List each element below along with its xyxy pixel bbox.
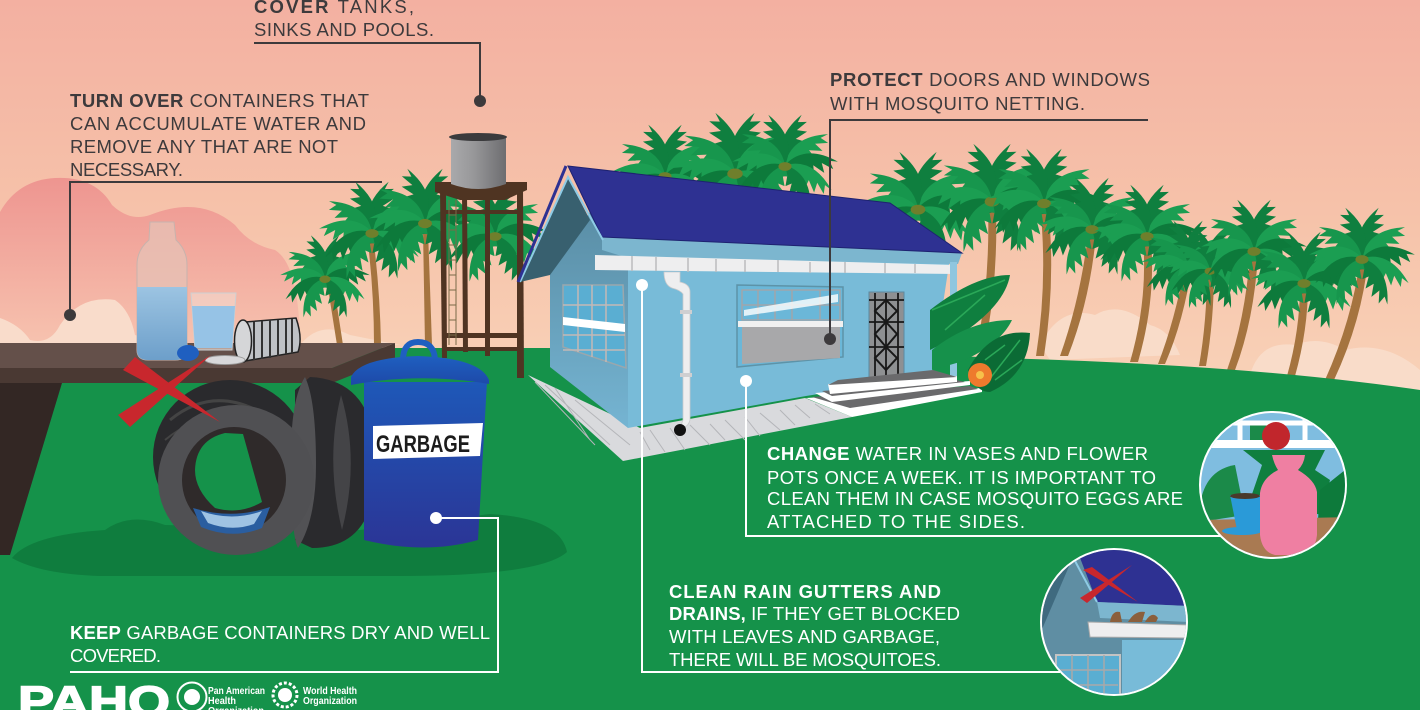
cover tanks leader line [254, 43, 480, 101]
palm left group [279, 166, 549, 345]
downpipe [664, 272, 692, 436]
protect leader line [830, 120, 1148, 339]
house [518, 166, 982, 461]
porch column [950, 262, 957, 379]
circle inset: blocked gutter [1040, 548, 1190, 700]
change water text: ATTACHED TO THE SIDES. [767, 511, 1025, 532]
change water text [767, 443, 1183, 532]
green ground [0, 348, 1420, 710]
foundation pattern [535, 382, 830, 452]
PAHO emblem [178, 682, 206, 710]
gable roof edge [520, 177, 603, 282]
table with containers [0, 343, 395, 555]
can lid and bottle cap [177, 345, 245, 364]
bin label text: GARBAGE [376, 431, 470, 458]
side wall [550, 212, 628, 428]
turn over leader line [70, 182, 382, 315]
banana and monstera leaves with hibiscus [930, 275, 1030, 392]
WHO name [303, 685, 357, 707]
clean gutters text: CLEAN RAIN GUTTERS AND [669, 581, 941, 602]
clean gutters leader line [642, 285, 1060, 672]
table front [0, 343, 395, 383]
bin lid [351, 356, 489, 385]
keep garbage leader line [70, 518, 498, 672]
clean gutters text: WITH LEAVES AND GARBAGE, [669, 626, 940, 647]
glass of water [191, 293, 236, 350]
cover tanks text: SINKS AND POOLS. [254, 19, 434, 40]
circle inset: vase and flower pot [1195, 410, 1355, 560]
tip: keep garbage containers dry [70, 512, 498, 672]
water tank [449, 133, 507, 189]
clean gutters text: THERE WILL BE MOSQUITOES. [669, 649, 941, 670]
door with security grille [869, 292, 904, 377]
gable shade [520, 178, 590, 282]
PAHO name: Health [208, 695, 236, 707]
tip: cover tanks [254, 0, 486, 107]
tower legs [435, 182, 527, 378]
PAHO name [208, 685, 265, 710]
rain gutter [595, 255, 957, 274]
fascia under roof [602, 237, 962, 264]
change water text: CHANGE WATER IN VASES AND FLOWER [767, 443, 1148, 464]
sky background [0, 0, 1420, 400]
clean gutters text: DRAINS, IF THEY GET BLOCKED [669, 603, 960, 624]
front wall [628, 250, 950, 428]
front window with netting [737, 285, 843, 367]
ladder [449, 200, 456, 345]
change water leader line [746, 381, 1222, 536]
keep garbage text: COVERED. [70, 645, 161, 666]
bin handle [403, 342, 435, 360]
protect text [830, 69, 1150, 114]
red X over discarded containers [118, 355, 220, 427]
change water text: CLEAN THEM IN CASE MOSQUITO EGGS ARE [767, 488, 1183, 509]
bin body [364, 382, 487, 548]
bin label [373, 423, 483, 459]
table top [0, 343, 395, 368]
water tower [435, 133, 527, 378]
turn over text [70, 90, 369, 180]
tip: clean rain gutters [636, 279, 1060, 672]
PAHO name: Pan American [208, 685, 265, 697]
protect text: WITH MOSQUITO NETTING. [830, 93, 1085, 114]
tip: turn over containers [64, 90, 382, 321]
entry steps [806, 370, 982, 417]
keep garbage text [70, 622, 490, 666]
PAHO logo [18, 678, 357, 710]
blue roof [568, 166, 962, 253]
palm crowns behind house [611, 110, 839, 233]
keep garbage text: KEEP GARBAGE CONTAINERS DRY AND WELL [70, 622, 490, 643]
foundation [528, 375, 852, 461]
WHO emblem [273, 683, 297, 707]
table leg [0, 383, 62, 555]
turn over text: NECESSARY. [70, 159, 183, 180]
clean gutters text [669, 581, 960, 670]
front tire with standing water [158, 405, 314, 555]
turn over text: CAN ACCUMULATE WATER AND [70, 113, 366, 134]
back tire [153, 380, 307, 534]
turn over text: TURN OVER CONTAINERS THAT [70, 90, 369, 111]
palm trees behind scene [279, 110, 1416, 380]
garbage bin [351, 342, 489, 548]
protect text: PROTECT DOORS AND WINDOWS [830, 69, 1150, 90]
side tire [291, 377, 376, 548]
pink clouds left [0, 178, 300, 350]
bottle [137, 222, 187, 360]
tip: change water in vases [740, 375, 1222, 536]
palm right group [857, 141, 1416, 380]
WHO name: Organization [303, 695, 357, 707]
tip: protect doors and windows [824, 69, 1150, 345]
side window [563, 285, 626, 368]
turn over text: REMOVE ANY THAT ARE NOT [70, 136, 338, 157]
pale clouds right [300, 309, 1420, 395]
change water text: POTS ONCE A WEEK. IT IS IMPORTANT TO [767, 467, 1156, 488]
cover tanks text [254, 0, 434, 40]
WHO name: World Health [303, 685, 357, 697]
ground shadow under tires and bin [12, 514, 567, 576]
tin can on its side [234, 318, 300, 362]
